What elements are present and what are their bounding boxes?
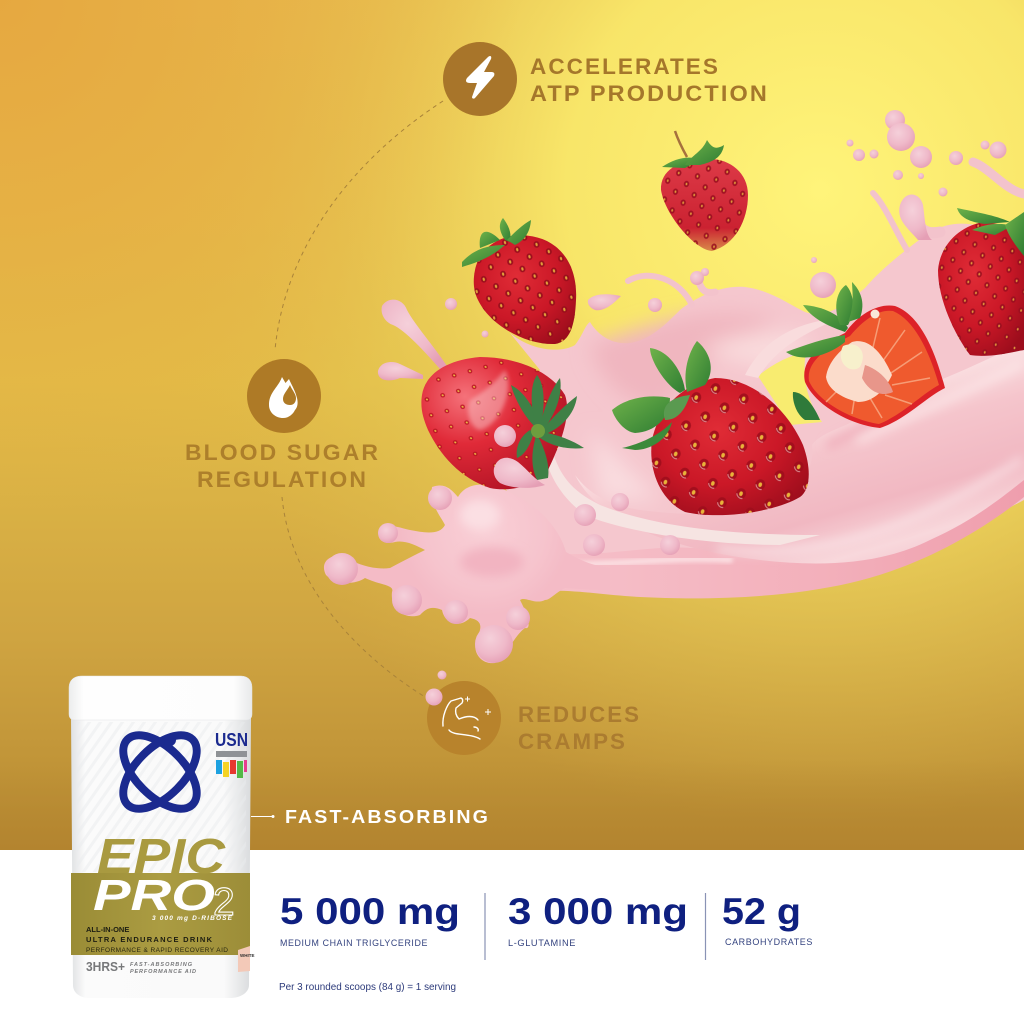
back milk sheet <box>500 224 1024 575</box>
product tub: PERFORMANCE & RAPID RECOVERY AID <box>86 947 228 954</box>
product tub <box>69 676 254 998</box>
logo: atom <box>111 723 209 821</box>
stat: carbohydrates <box>722 891 813 947</box>
3 hours note: 3HRS+ <box>86 959 125 974</box>
product tub: 2 <box>213 881 235 924</box>
stat: carbohydrates: 52 g <box>722 891 801 932</box>
stat: MCT: 5 000 mg <box>280 891 460 932</box>
back dark leaf <box>793 392 820 420</box>
label text: REGULATION <box>197 467 368 492</box>
label text: REDUCES <box>518 702 641 727</box>
stat: carbohydrates: CARBOHYDRATES <box>725 937 813 947</box>
descriptor: ULTRA ENDURANCE DRINK <box>86 935 213 944</box>
strawberry: cut half <box>786 282 945 428</box>
benefit: reduces cramps <box>427 681 641 755</box>
calyx <box>957 208 1024 256</box>
splash shading <box>460 500 524 577</box>
strawberry: top falling <box>661 131 748 251</box>
milk splash <box>324 110 1024 663</box>
stat: glutamine: 3 000 mg <box>508 891 688 932</box>
stats row <box>279 891 813 993</box>
stat: glutamine: L-GLUTAMINE <box>508 938 576 948</box>
product name: EPIC <box>97 830 226 884</box>
white milk stream <box>545 450 820 545</box>
calyx <box>511 375 584 480</box>
right milk spill lower layer <box>520 435 1024 598</box>
serving note: Per 3 rounded scoops (84 g) = 1 serving <box>279 981 456 993</box>
strawberry: right edge <box>938 208 1024 356</box>
calyx <box>462 218 531 267</box>
fast-absorbing callout: FAST-ABSORBING <box>285 806 490 827</box>
3 hours note: FAST-ABSORBING <box>130 962 193 968</box>
calyx <box>786 282 862 357</box>
3 hours note <box>86 959 196 975</box>
stat: glutamine <box>508 891 688 948</box>
label text: ATP PRODUCTION <box>530 81 769 106</box>
descriptor: ALL-IN-ONE <box>86 925 129 934</box>
milk droplets over fruit <box>494 425 680 556</box>
tub lid <box>69 676 252 720</box>
strawberry: left with calyx <box>421 357 584 489</box>
front swoosh <box>575 342 1024 563</box>
flesh rays <box>826 318 930 418</box>
benefit: blood sugar regulation <box>185 359 380 492</box>
stat: MCT: MEDIUM CHAIN TRIGLYCERIDE <box>280 938 428 948</box>
dotted connector arcs <box>275 101 443 697</box>
gold label band <box>71 873 250 955</box>
yellow gap in milk <box>758 352 822 425</box>
stem <box>675 131 687 157</box>
dose: 3 000 mg D-RIBOSE <box>152 915 233 922</box>
icon: flexed arm <box>427 681 501 755</box>
stat: MCT <box>280 891 460 948</box>
strawberry: top centre-left <box>462 218 576 344</box>
strawberry: large centre <box>612 341 809 515</box>
product tub: PRO <box>93 871 215 920</box>
3 hours note: PERFORMANCE AID <box>130 969 196 975</box>
white lower panel <box>0 850 1024 1024</box>
splash beads <box>326 486 530 663</box>
swoosh highlights <box>720 365 1020 551</box>
droplets over cramps icon <box>426 670 446 706</box>
label text: BLOOD SUGAR <box>185 440 380 465</box>
label text: CRAMPS <box>518 729 627 754</box>
USN brand <box>215 730 248 778</box>
highlight <box>468 370 508 430</box>
droplets <box>378 110 1007 380</box>
milk shading <box>590 313 815 500</box>
milk tendrils upper <box>628 162 1024 305</box>
upper wave highlight <box>745 318 840 378</box>
icon: water drops <box>247 359 321 433</box>
flavour tag: WHITE <box>240 953 254 958</box>
tub body <box>71 718 251 998</box>
splash blob <box>324 485 610 663</box>
calyx <box>612 341 711 450</box>
calyx <box>662 140 724 168</box>
flavour tag <box>238 946 254 972</box>
label text: ACCELERATES <box>530 54 720 79</box>
benefit: accelerates ATP production <box>443 42 769 116</box>
icon: lightning bolt <box>443 42 517 116</box>
lower band highlight <box>540 559 730 564</box>
USN brand: USN <box>215 730 248 750</box>
